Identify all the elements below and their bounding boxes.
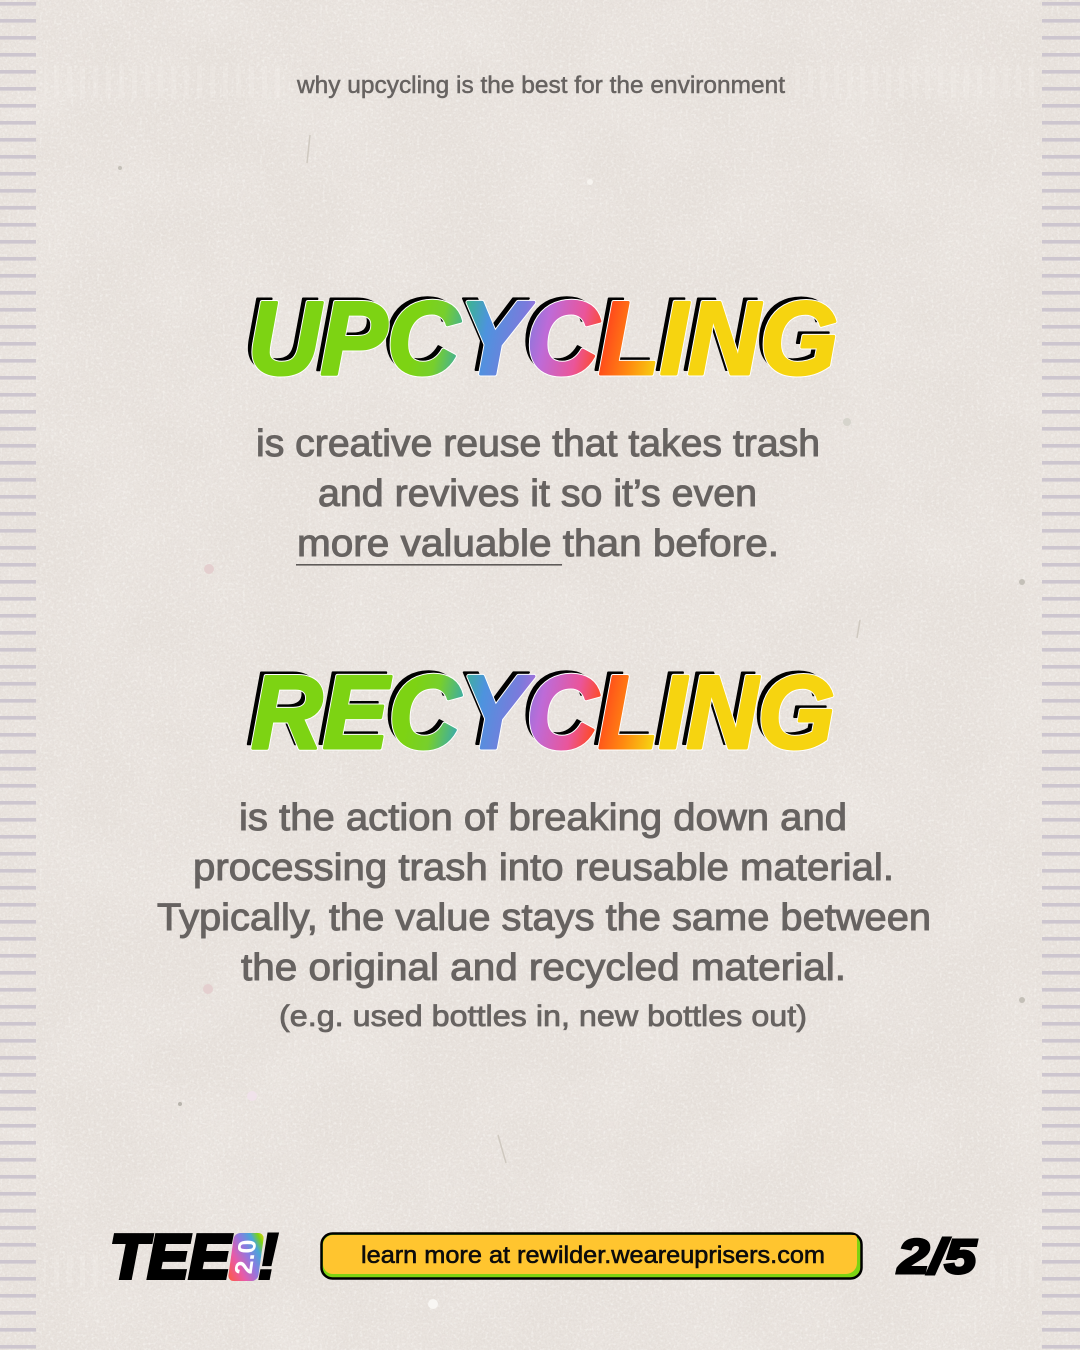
left edge stripes [0,0,36,1350]
recycling definition: is the action of breaking down and [239,797,847,839]
subtitle: why upcycling is the best for the environment [296,72,785,99]
heading: UPCYCLING: UPCYCLING [248,281,838,397]
heading: UPCYCLING: UPCYCLING [243,277,833,393]
logo badge: 2.0 [228,1233,264,1281]
paper specks [118,135,1025,1309]
recycling definition: (e.g. used bottles in, new bottles out) [279,1000,807,1033]
heading: RECYCLING: RECYCLING [246,651,830,767]
logo: TEE 2.0 [110,1219,279,1293]
recycling definition: processing trash into reusable material. [193,847,894,889]
upcycling definition: and revives it so it’s even [318,473,757,515]
logo: TEE 2.0: ! [257,1219,279,1293]
upcycling definition: more valuable than before. [297,523,779,565]
upcycling definition: is creative reuse that takes trash [256,423,820,465]
page number: 2/5 [897,1231,978,1284]
recycling definition: Typically, the value stays the same between [157,897,931,939]
heading: RECYCLING: RECYCLING [251,655,835,771]
right edge stripes [1042,0,1080,1350]
upcycling definition [256,423,820,566]
button: learn more: learn more at rewilder.weareuprisers.com [361,1242,825,1269]
recycling definition [157,797,931,1033]
recycling definition: the original and recycled material. [241,947,846,989]
logo: TEE 2.0: TEE [110,1223,232,1292]
heading: UPCYCLING: UPCYCLING [248,281,838,397]
button: learn more [322,1234,862,1278]
heading: RECYCLING: RECYCLING [251,655,835,771]
logo badge: 2.0: 2.0 [230,1240,262,1274]
